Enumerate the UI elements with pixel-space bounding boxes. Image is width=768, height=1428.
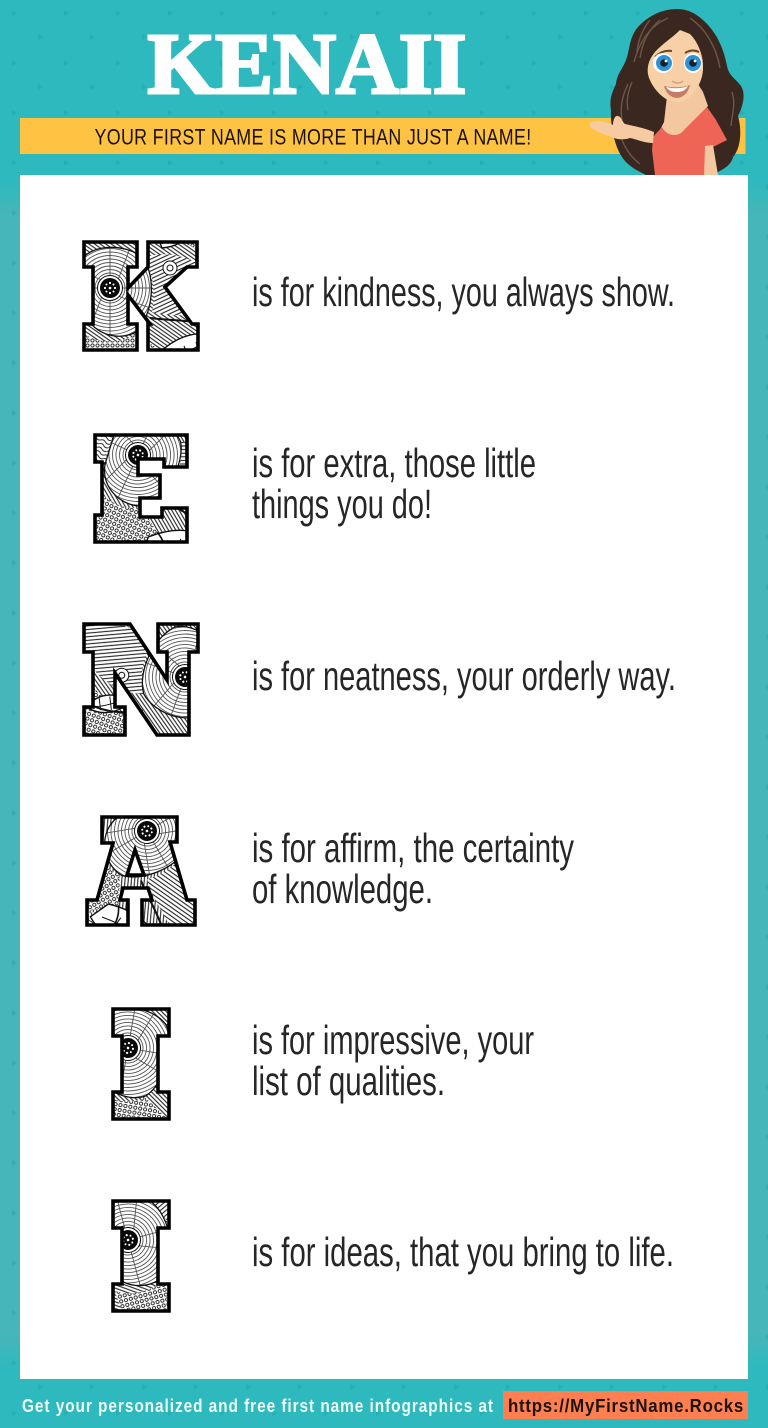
footer text: Get your personalized and free first name infographics at [22,1396,494,1416]
letter A [85,815,197,927]
text I: is for impressive, your [252,1017,534,1063]
eyes [653,53,702,73]
row: A [85,815,574,927]
hand [590,116,654,143]
eyebrows [655,51,699,57]
text A [252,825,574,912]
row: K [82,240,672,352]
row: I second [111,1199,672,1313]
text A: of knowledge. [252,866,433,912]
letter N [82,622,200,737]
text I [252,1017,534,1104]
panel: white content [20,175,748,1379]
face [648,30,703,102]
row: N [82,622,674,737]
row: E [93,433,535,544]
footer [22,1391,748,1419]
letter E [93,433,189,544]
footer link box: https://MyFirstName.Rocks [508,1396,744,1416]
text E [252,440,536,527]
text E: is for extra, those little [252,440,536,486]
text E: things you do! [252,481,432,527]
banner [20,118,746,154]
footer link box [503,1391,748,1419]
row: I [111,1007,534,1121]
letter I second [111,1199,171,1313]
text I: list of qualities. [252,1058,445,1104]
nose [672,81,683,83]
letter K [82,240,200,352]
banner text: YOUR FIRST NAME IS MORE THAN JUST A NAME! [94,124,532,150]
mouth [664,85,690,98]
right arm [704,145,718,175]
letter I [111,1007,171,1121]
text A: is for affirm, the certainty [252,825,574,871]
shirt [652,107,727,175]
icon: cartoon woman [590,9,744,175]
title: KENAII [148,15,466,112]
neck and chest [660,84,708,136]
